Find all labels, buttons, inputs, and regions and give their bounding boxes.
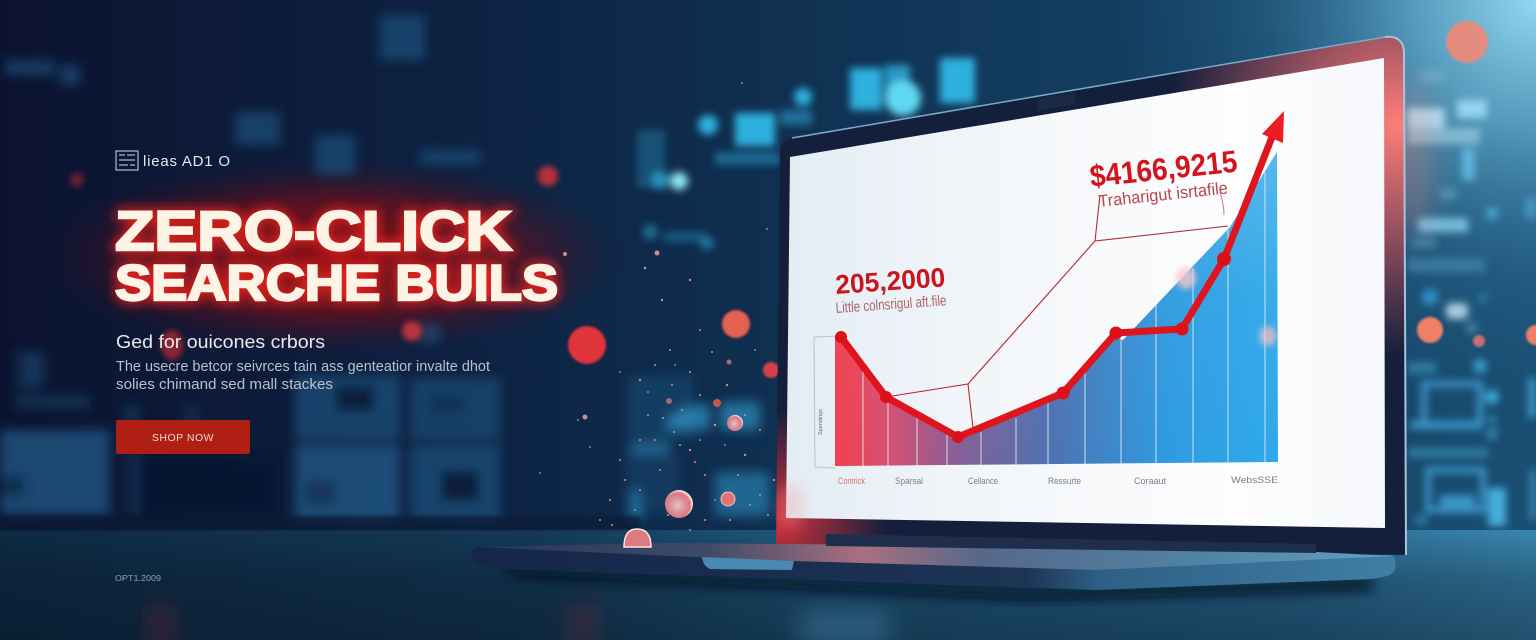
red trend line with arrow [835, 111, 1284, 443]
hinge [826, 534, 1316, 553]
floor [0, 516, 1536, 640]
laptop screen [786, 58, 1385, 528]
title: ZERO-CLICK [115, 199, 512, 262]
subheading: Ged for ouicones crbors [116, 332, 325, 352]
y-axis bracket [814, 336, 838, 468]
bright upper centre lights [637, 58, 1536, 526]
sphere [727, 415, 743, 431]
callout: low value [834, 262, 947, 317]
laptop lid [776, 37, 1406, 555]
sphere [665, 490, 693, 518]
logo icon [116, 151, 138, 170]
title: ZERO-CLICK [115, 199, 512, 262]
laptop [471, 30, 1426, 600]
keyboard deck [478, 543, 1392, 570]
blurred data panels background [0, 15, 770, 520]
near laptop small panels [630, 402, 770, 520]
title: SEARCHE BUILS [115, 255, 558, 311]
x-axis labels: Sparsal [895, 476, 923, 487]
callout: high value [1088, 144, 1239, 211]
sphere [624, 529, 651, 547]
logo [116, 151, 230, 170]
x-axis labels: Ressurte [1048, 476, 1081, 487]
x-axis labels: WebsSSE [1231, 475, 1278, 486]
button: shop now: SHOP NOW [152, 432, 214, 444]
chart area bars [835, 152, 1278, 466]
left and centre panels [0, 355, 693, 520]
callout: low value: 205,2000 [834, 262, 946, 300]
dim upper left panels [5, 15, 480, 390]
description text [116, 359, 490, 393]
laptop shadow [500, 566, 1375, 600]
button: shop now [116, 420, 250, 454]
chart [814, 111, 1284, 487]
red bokeh dots [70, 21, 1536, 378]
particles and spheres [539, 82, 775, 547]
laptop base [471, 547, 1396, 590]
callout: high value: Traharigut isrtafile [1097, 178, 1229, 211]
title: SEARCHE BUILS [115, 255, 558, 311]
description text: solies chimand sed mall stackes [116, 377, 333, 393]
x-axis labels: Cellance [968, 476, 998, 487]
glow beside lid [1398, 80, 1426, 240]
x-axis labels: Coraaut [1134, 476, 1166, 487]
callout: low value: Little colnsrigul aft.file [835, 292, 947, 317]
x-axis labels [838, 475, 1278, 487]
footer date: OPT1.2009 [115, 573, 161, 583]
trackpad notch [702, 557, 794, 570]
description text: The usecre betcor seivrces tain ass genteatior invalte dhot [116, 359, 490, 375]
sphere [721, 492, 735, 506]
logo: lieas AD1 O [143, 153, 230, 170]
webcam notch [1037, 92, 1075, 111]
callout: high value: $4166,9215 [1088, 144, 1239, 194]
right side panels [1407, 70, 1536, 526]
x-axis labels: Contrick [838, 476, 865, 487]
title [115, 199, 558, 311]
y-axis bracket: Spendings [818, 409, 824, 435]
leader lines [886, 192, 1228, 428]
